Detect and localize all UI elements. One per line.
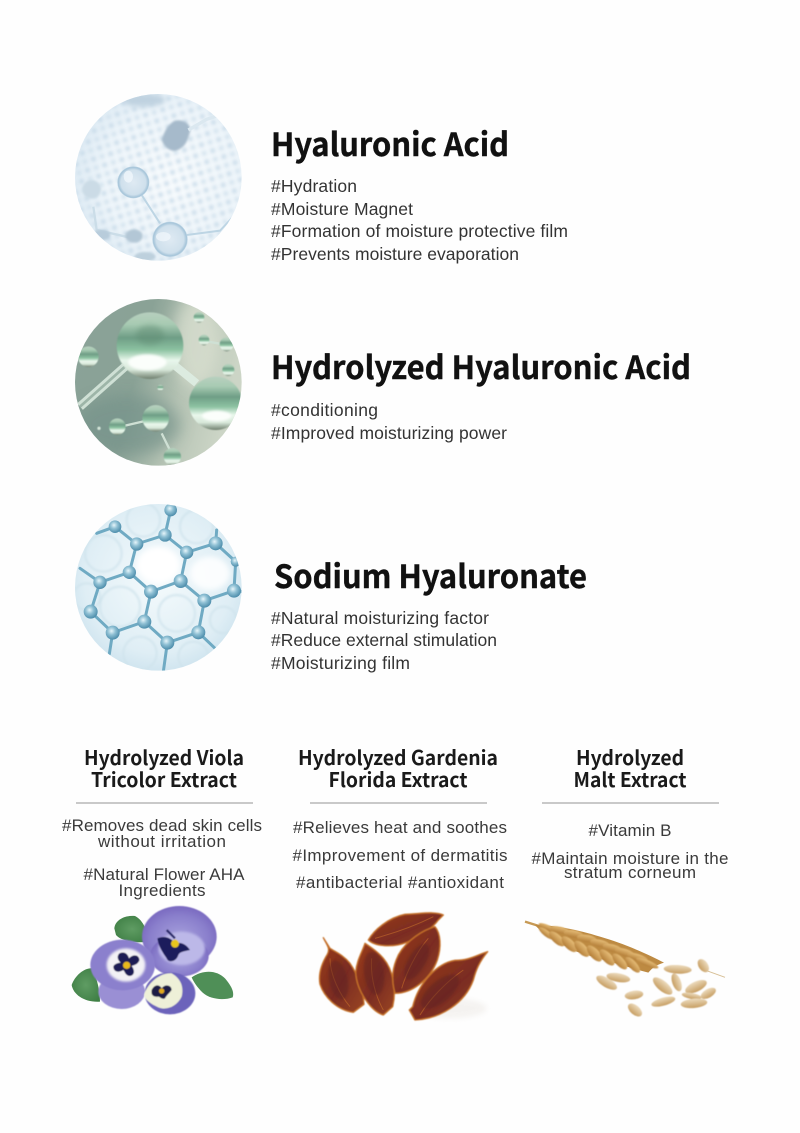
panel: hyaluronic acid: [73, 93, 568, 264]
tags: #Reduce external stimulation: [271, 630, 497, 650]
tags: #antibacterial #antioxidant: [296, 873, 504, 892]
image: translucent blue molecule circle: [73, 93, 243, 263]
tags: #Moisturizing film: [271, 653, 410, 673]
tags: #Removes dead skin cells: [62, 816, 262, 835]
tags: without irritation: [97, 832, 226, 851]
image: green glass molecule circle: [73, 295, 243, 468]
image: dried gardenia fruits: [319, 913, 488, 1020]
tags: [292, 818, 508, 892]
panel: hydrolyzed hyaluronic acid: [73, 295, 691, 468]
heading: Hydrolyzed: [576, 742, 684, 771]
heading: Sodium Hyaluronate: [274, 552, 587, 598]
heading: Malt Extract: [574, 764, 687, 793]
tags: #Natural Flower AHA: [84, 865, 245, 884]
heading: Hydrolyzed Gardenia: [298, 742, 498, 771]
tags: Ingredients: [118, 881, 206, 900]
tags: #Prevents moisture evaporation: [271, 244, 519, 264]
image: wheat ear and grains: [525, 918, 725, 1019]
tags: [62, 816, 262, 900]
tags: #Improvement of dermatitis: [292, 846, 508, 865]
tags: [271, 608, 497, 673]
tags: #Improved moisturizing power: [271, 423, 507, 443]
heading: Florida Extract: [328, 764, 468, 793]
tags: #Formation of moisture protective film: [271, 221, 568, 241]
heading: Hydrolyzed Hyaluronic Acid: [271, 343, 691, 389]
heading: Hydrolyzed Viola: [84, 742, 244, 771]
tags: #conditioning: [271, 400, 378, 420]
tags: [532, 821, 728, 882]
tags: #Relieves heat and soothes: [293, 818, 507, 837]
lattice bonds: [80, 510, 243, 672]
heading: [574, 742, 687, 793]
tags: #Hydration: [271, 176, 357, 196]
tags: #Moisture Magnet: [271, 199, 413, 219]
heading: Tricolor Extract: [91, 764, 238, 793]
tags: [271, 400, 507, 443]
tags: #Vitamin B: [588, 821, 672, 840]
image: blue hexagon lattice circle: [73, 503, 243, 673]
panel: malt extract: [525, 742, 728, 1019]
image: purple pansy flowers: [72, 906, 233, 1014]
panel: viola tricolor: [62, 742, 262, 1014]
large flower: [142, 906, 217, 977]
panel: sodium hyaluronate: [73, 503, 587, 673]
lattice nodes: [84, 504, 241, 650]
panel: gardenia florida: [292, 742, 508, 1020]
heading: [298, 742, 498, 793]
tags: #Natural moisturizing factor: [271, 608, 489, 628]
heading: [84, 742, 244, 793]
heading: Hyaluronic Acid: [271, 120, 509, 166]
left flower: [90, 940, 155, 1009]
tags: #Maintain moisture in the: [532, 849, 728, 868]
tags: stratum corneum: [564, 863, 696, 882]
small flower: [144, 972, 195, 1014]
tags: [271, 176, 568, 264]
